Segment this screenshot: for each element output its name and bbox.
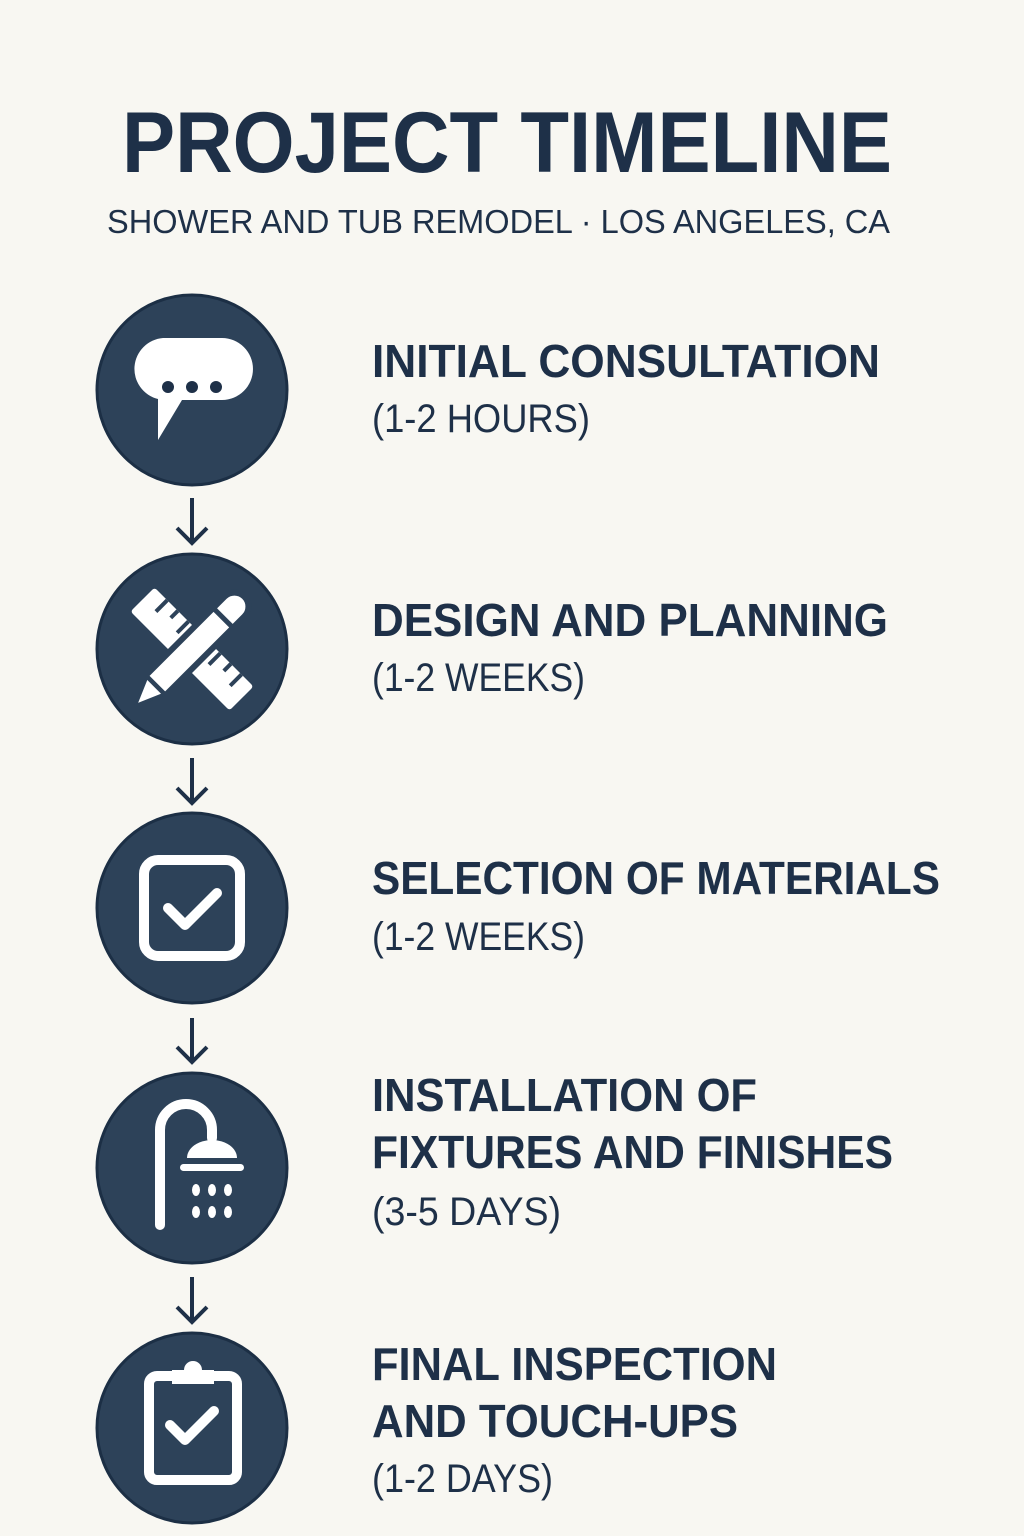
icon: ruler and pencil xyxy=(97,554,287,744)
step 4: installation xyxy=(97,1069,893,1263)
arrow 4 xyxy=(177,1277,207,1322)
title: PROJECT TIMELINE xyxy=(122,95,892,191)
arrow 2 xyxy=(177,758,207,803)
step 1: initial consultation xyxy=(97,295,880,485)
duration 5: (1-2 DAYS) xyxy=(372,1457,553,1501)
subtitle: SHOWER AND TUB REMODEL · LOS ANGELES, CA xyxy=(107,203,890,240)
step 5: final inspection xyxy=(97,1333,777,1523)
heading: installation of fixtures and finishes: INSTALLATION OF xyxy=(372,1069,757,1121)
heading: design and planning: DESIGN AND PLANNING xyxy=(372,594,888,646)
heading: installation of fixtures and finishes xyxy=(372,1069,893,1178)
duration 1: (1-2 HOURS) xyxy=(372,397,590,441)
heading: installation of fixtures and finishes: FIXTURES AND FINISHES xyxy=(372,1126,893,1178)
duration 4: (3-5 DAYS) xyxy=(372,1190,561,1234)
duration 3: (1-2 WEEKS) xyxy=(372,915,585,959)
step 3: selection of materials xyxy=(97,813,940,1003)
heading: final inspection and touch-ups: FINAL INSPECTION xyxy=(372,1338,777,1390)
duration 2: (1-2 WEEKS) xyxy=(372,656,585,700)
arrow 1 xyxy=(177,498,207,543)
heading: initial consultation: INITIAL CONSULTATION xyxy=(372,335,880,387)
arrow 3 xyxy=(177,1018,207,1062)
heading: final inspection and touch-ups: AND TOUCH-UPS xyxy=(372,1395,738,1447)
heading: selection of materials: SELECTION OF MATERIALS xyxy=(372,852,940,904)
step 2: design and planning xyxy=(97,554,888,744)
heading: final inspection and touch-ups xyxy=(372,1338,777,1447)
icon: checkbox xyxy=(97,813,287,1003)
icon: shower xyxy=(97,1073,287,1263)
icon: clipboard xyxy=(97,1333,287,1523)
icon: chat bubble xyxy=(97,295,287,485)
